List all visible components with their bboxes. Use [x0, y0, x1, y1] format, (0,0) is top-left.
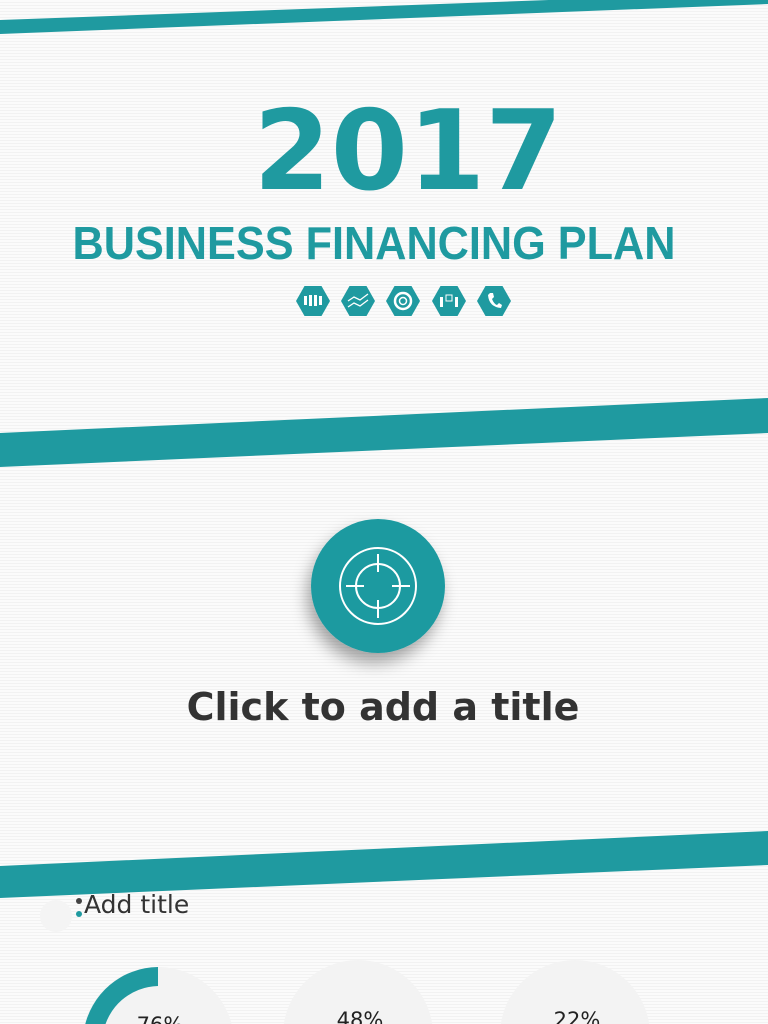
icon: meeting [432, 286, 466, 316]
subtitle: BUSINESS FINANCING PLAN [72, 217, 675, 269]
icon: lifebuoy [386, 286, 420, 316]
icon: phone [477, 286, 511, 316]
donut 76% [82, 967, 234, 1024]
add title label: Add title [84, 890, 189, 919]
section title: Click to add a title [187, 685, 579, 729]
donut 48% [283, 960, 433, 1024]
donut 22% [500, 960, 650, 1024]
year heading: 2017 [254, 87, 562, 216]
donut charts [85, 967, 600, 1024]
icon row [296, 286, 511, 316]
icon: chart [341, 286, 375, 316]
icon: people [296, 286, 330, 316]
icon: target circle [298, 519, 450, 672]
